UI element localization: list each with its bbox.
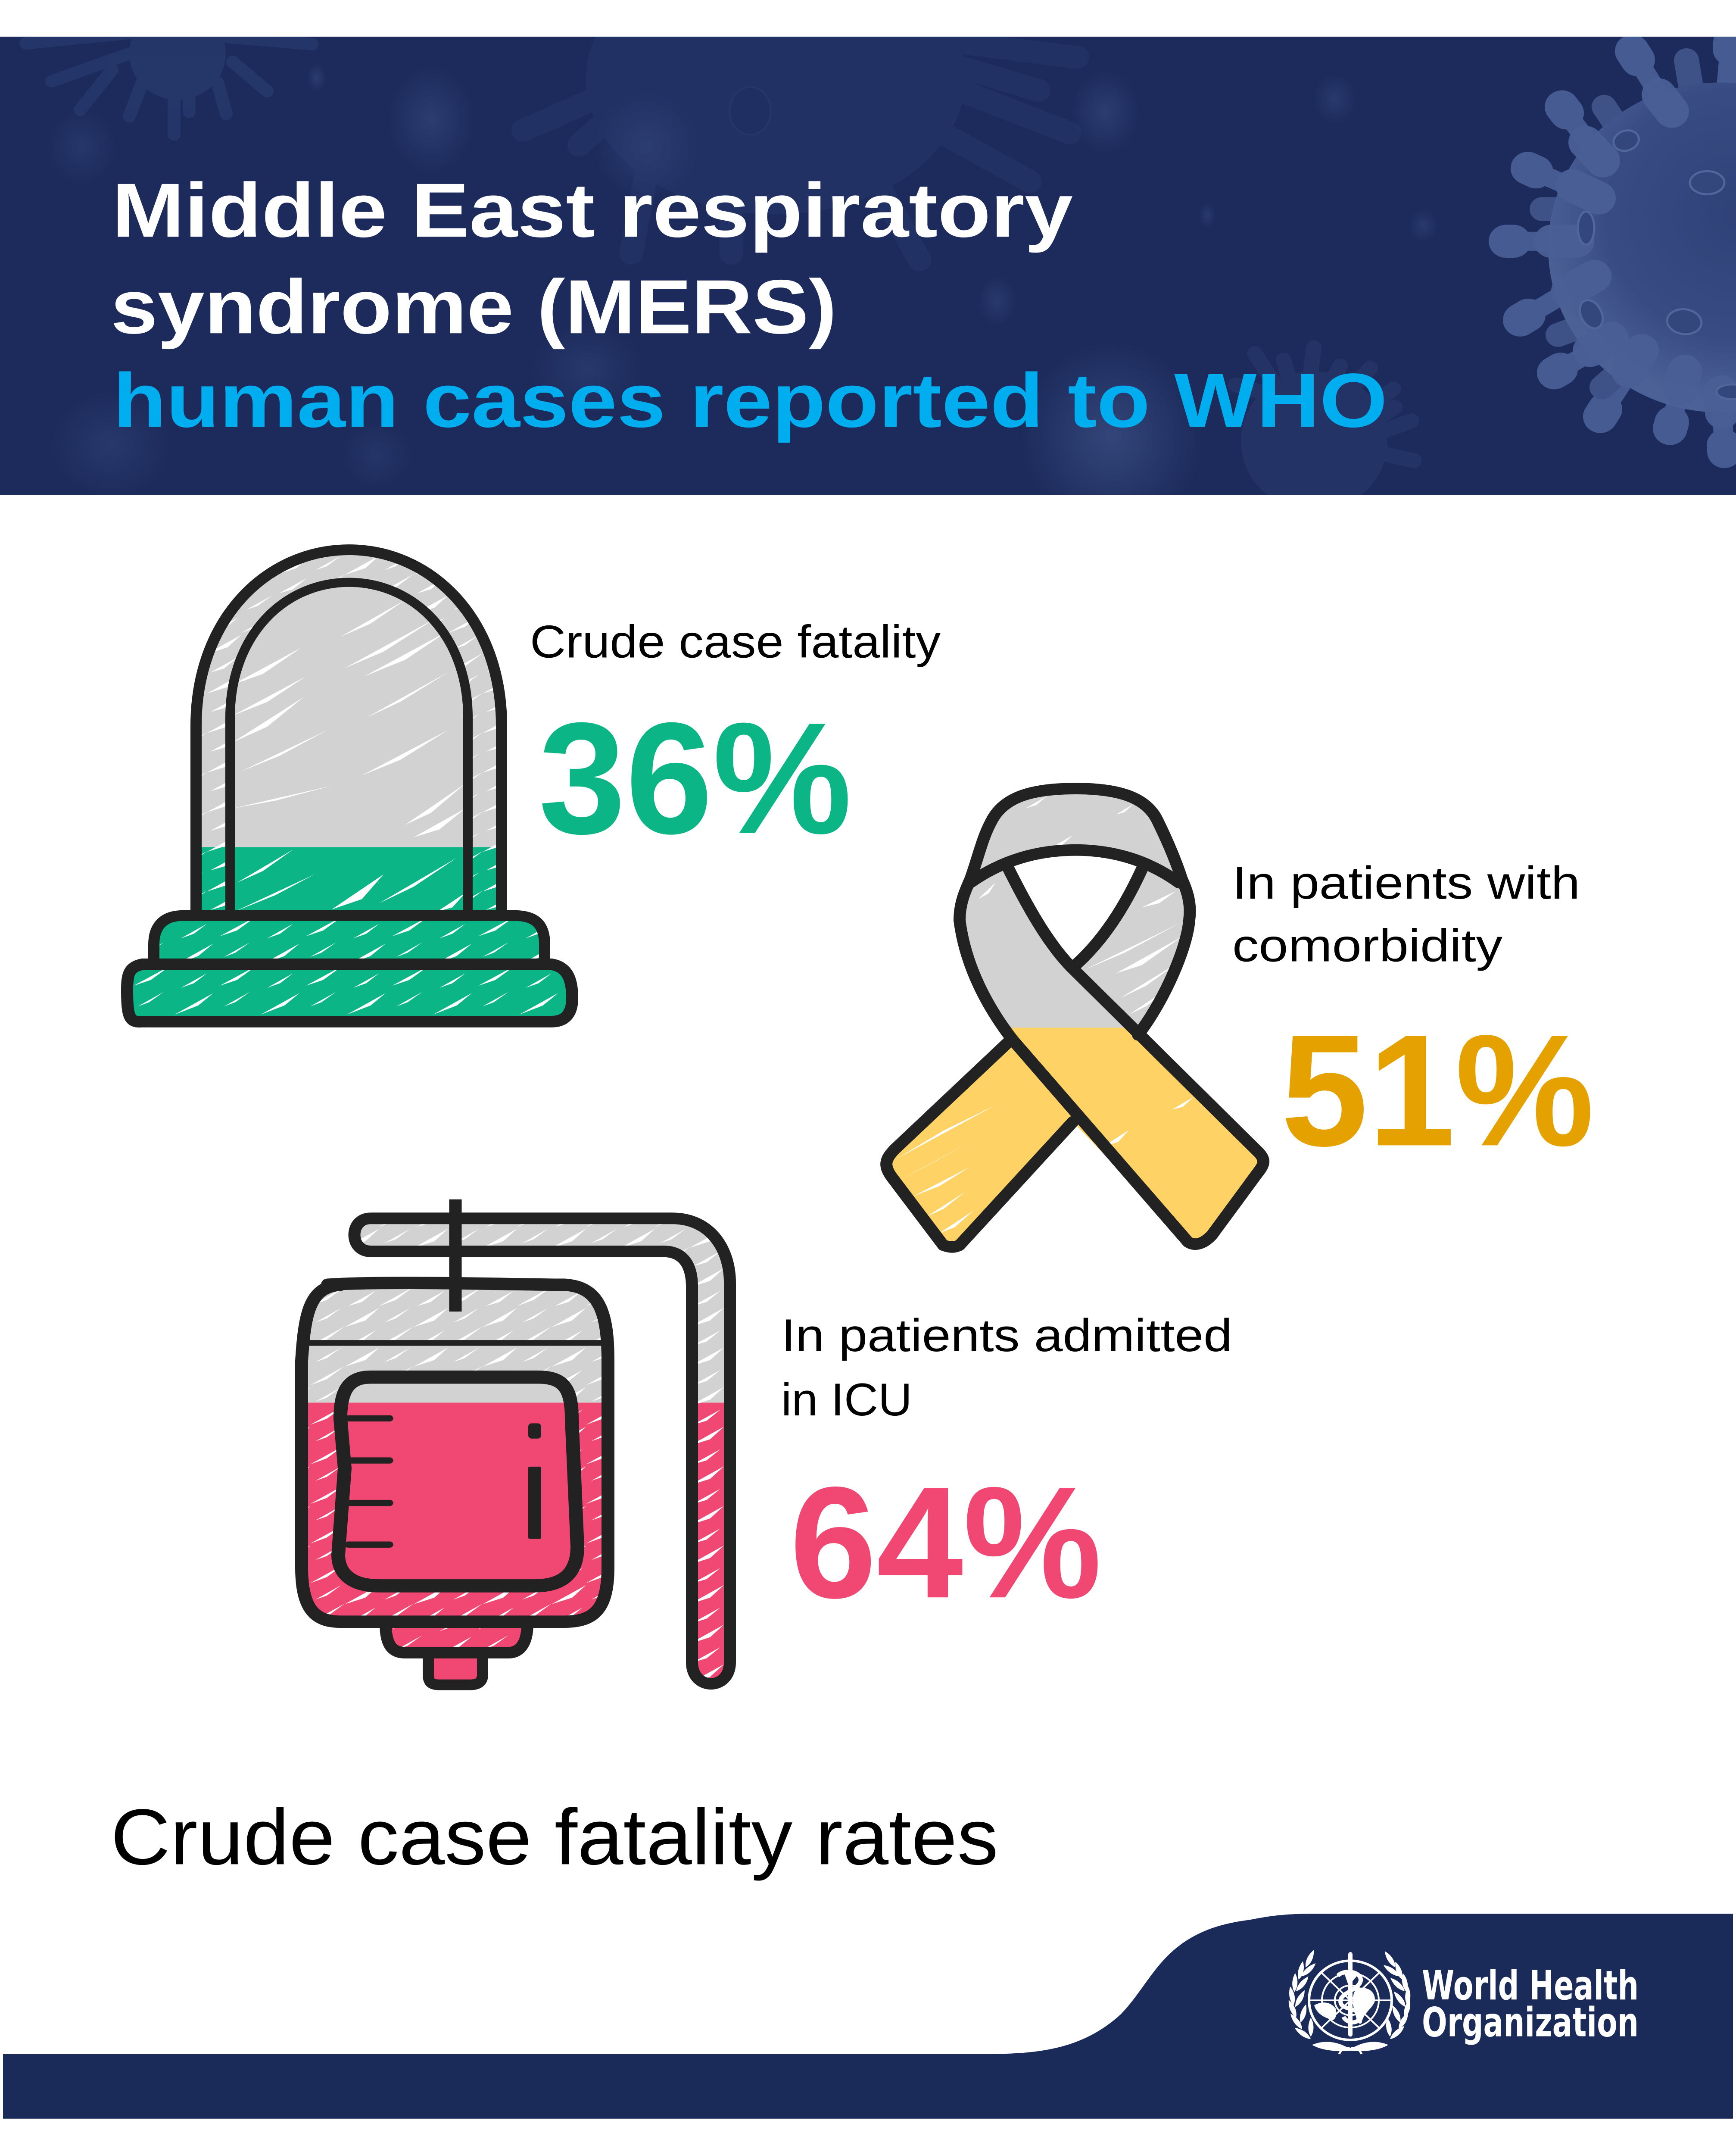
faint virus: top left — [19, 37, 318, 141]
label: in patients with comorbidity: In patients with — [1232, 857, 1580, 909]
label: in patients admitted in ICU: in ICU — [781, 1374, 912, 1426]
panel: ICU — [302, 1199, 1232, 1685]
logo: World Health Organization — [1422, 1962, 1639, 2046]
title: Middle East respiratory — [112, 167, 1073, 253]
subtitle: crude case fatality rates: Crude case fatality rates — [111, 1793, 998, 1881]
logo: World Health Organization: World Health — [1422, 1962, 1639, 2009]
title: human cases reported to WHO — [113, 357, 1387, 443]
label: crude case fatality: Crude case fatality — [530, 616, 941, 668]
label: in patients with comorbidity: comorbidity — [1232, 920, 1502, 971]
value: 36%: 36% — [539, 690, 852, 867]
banner: header — [0, 37, 1736, 495]
virus: right — [1506, 43, 1736, 452]
faint virus: top centre — [595, 37, 1004, 136]
footer band — [3, 1914, 1733, 2119]
footer shape — [3, 1914, 1733, 2119]
panel: crude case fatality — [127, 550, 941, 1022]
panel: comorbidity — [885, 789, 1594, 1247]
value: 64%: 64% — [790, 1454, 1102, 1631]
label: in patients admitted in ICU: In patients admitted — [781, 1310, 1232, 1361]
icon: IV blood bag — [302, 1199, 730, 1685]
label: in patients with comorbidity — [1232, 857, 1580, 971]
faint virus: bottom — [1236, 348, 1414, 512]
logo: World Health Organization: Organization — [1422, 1999, 1639, 2046]
banner background — [0, 37, 1736, 495]
icon: awareness ribbon — [885, 789, 1263, 1247]
banner virus artwork — [26, 0, 1736, 532]
value: 51%: 51% — [1281, 1002, 1594, 1179]
icon: tombstone — [127, 550, 572, 1022]
title — [111, 167, 1387, 443]
title: syndrome (MERS) — [111, 264, 837, 350]
label: in patients admitted in ICU — [781, 1310, 1232, 1426]
logo: WHO emblem — [1287, 1949, 1413, 2054]
